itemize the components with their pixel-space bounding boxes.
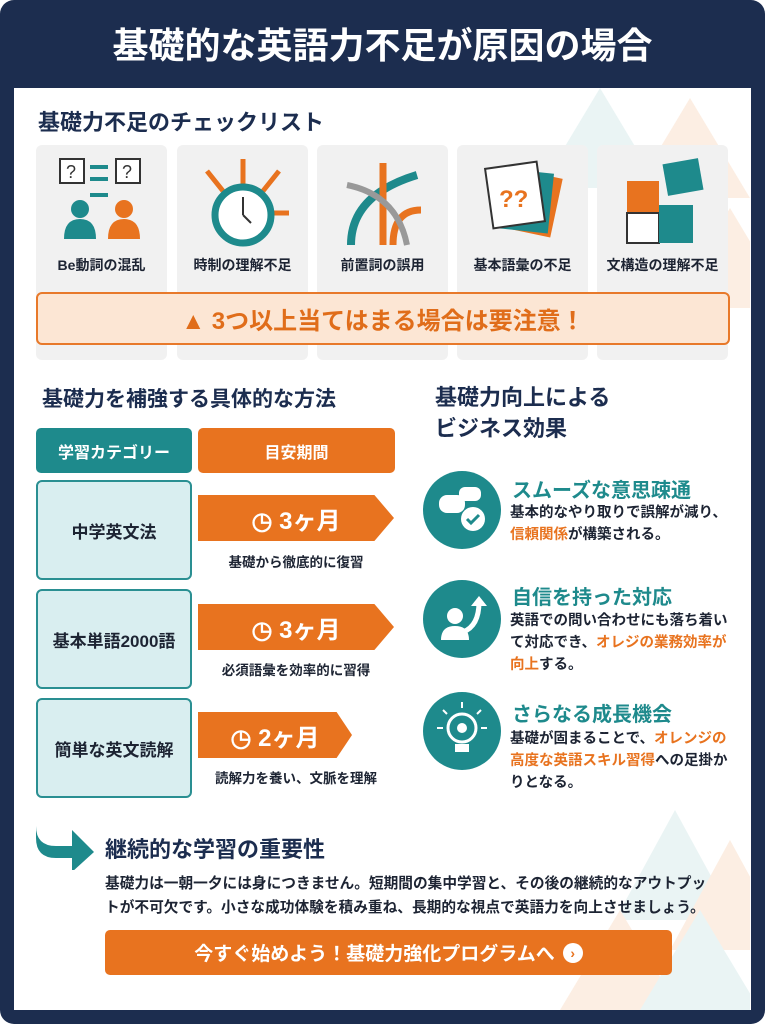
card: be verb: Be動詞の混乱 (58, 257, 145, 273)
text: さらなる成長機会 (512, 704, 672, 726)
effect 1 (423, 471, 501, 549)
card: vocabulary (457, 145, 588, 360)
text: 基礎が固まることで、オレンジの高度な英語スキル習得への足掛かりとなる。 (510, 731, 728, 791)
text: 自信を持った対応 (512, 587, 672, 609)
button (105, 930, 672, 975)
card: prepositions (317, 145, 448, 360)
card: prepositions: 前置詞の誤用 (340, 257, 424, 273)
card: sentence structure: 文構造の理解不足 (606, 257, 718, 273)
text: 読解力を養い、文脈を理解 (215, 771, 377, 786)
row 2 (36, 589, 192, 689)
row 3: 簡単な英文読解 (54, 740, 174, 760)
decor: triangles bottom right (560, 810, 750, 1010)
card: be verb: ? (66, 162, 76, 182)
text: 英語での問い合わせにも落ち着いて対応でき、オレジの業務効率が向上する。 (510, 613, 728, 673)
text: ◷ 3ヶ月 (252, 508, 340, 534)
text: 必須語彙を効率的に習得 (222, 663, 370, 678)
heading: business effects: ビジネス効果 (435, 416, 567, 441)
card: be verb: ? (122, 162, 132, 182)
effect 2 (423, 580, 501, 658)
row 2: 基本単語2000語 (53, 632, 175, 650)
button: 今すぐ始めよう！基礎力強化プログラムへ (194, 944, 555, 965)
callout: warning: ▲ 3つ以上当てはまる場合は要注意！ (181, 308, 585, 335)
card: tense (177, 145, 308, 360)
header: category: 学習カテゴリー (58, 444, 170, 462)
card: sentence structure (597, 145, 728, 360)
decor: triangles top right (566, 88, 750, 308)
text: ◷ 2ヶ月 (231, 724, 319, 752)
card: vocabulary: ?? (499, 186, 528, 213)
heading: checklist: 基礎力不足のチェックリスト (38, 110, 324, 135)
table (36, 428, 395, 473)
heading: business effects (435, 385, 610, 441)
card: tense: 時制の理解不足 (194, 257, 292, 273)
icon: bent arrow (36, 826, 94, 870)
title: 基礎的な英語力不足が原因の場合 (112, 25, 652, 66)
text: 信頼関係が構築される。 (510, 527, 670, 543)
row 1: 中学英文法 (72, 522, 156, 542)
paragraph: 基礎力は一朝一夕には身につきません。短期間の集中学習と、その後の継続的なアウトプットが不可欠です。小さな成功体験を積み重ね、長期的な視点で英語力を向上させましょう。 (105, 876, 706, 916)
text: 基礎から徹底的に復習 (228, 555, 364, 570)
row 1 (36, 480, 192, 580)
card: be verb (36, 145, 167, 360)
text: 基本的なやり取りで誤解が減り、 (510, 505, 727, 521)
effect 3 (423, 692, 501, 770)
text: ◷ 3ヶ月 (252, 616, 340, 644)
header: category (36, 428, 192, 473)
header: period (198, 428, 395, 473)
header: period: 目安期間 (264, 444, 328, 462)
heading: methods: 基礎力を補強する具体的な方法 (42, 388, 336, 411)
row 3 (36, 698, 192, 798)
button: › (570, 944, 575, 960)
heading: business effects: 基礎力向上による (435, 385, 610, 410)
heading: continuous learning: 継続的な学習の重要性 (105, 837, 325, 862)
text: スムーズな意思疎通 (512, 480, 691, 502)
card: vocabulary: 基本語彙の不足 (474, 257, 572, 273)
callout: warning (36, 292, 730, 345)
